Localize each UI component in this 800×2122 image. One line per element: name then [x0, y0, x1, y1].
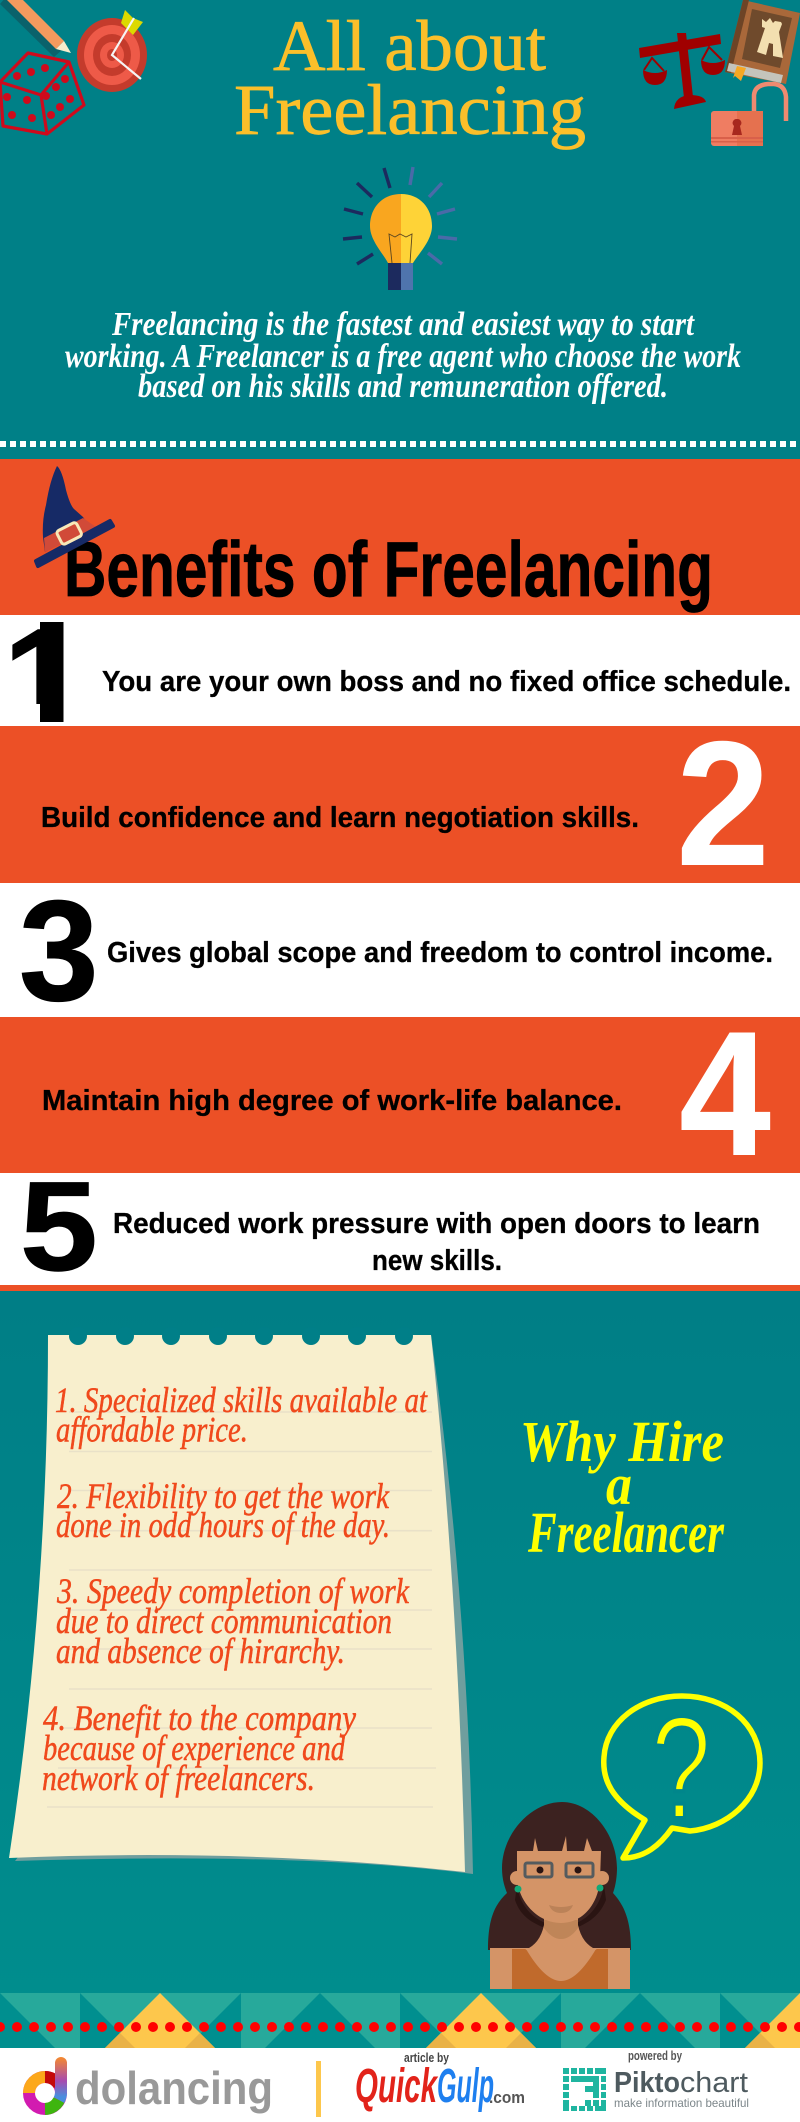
panel: benefit 4 [0, 994, 800, 1193]
panel: benefit 1 [12, 622, 790, 722]
reason 4: 4. Benefit to the company [43, 1698, 356, 1738]
logo: quickgulp: .com [489, 2088, 525, 2107]
number 2: 2 [676, 704, 770, 903]
title: All about [273, 6, 546, 86]
speech bubble with question mark [604, 1687, 760, 1858]
reason 2: 2. Flexibility to get the work [57, 1476, 390, 1516]
reason 3: and absence of hirarchy. [56, 1631, 345, 1671]
icon: dice [0, 53, 84, 134]
reason 4: because of experience and [43, 1728, 346, 1768]
benefit 5 text: new skills. [372, 1245, 502, 1277]
heading: why hire a freelancer [520, 1409, 724, 1565]
icon: witch hat [36, 466, 113, 566]
note paper [9, 1327, 473, 1874]
benefit 5 text [113, 1208, 760, 1277]
logo: dolancing: dolancing [75, 2062, 273, 2114]
icon: target with arrow [77, 10, 147, 92]
reason 2 [56, 1476, 390, 1545]
icon: book [725, 0, 800, 84]
logo: piktochart: Pikto [614, 2067, 680, 2099]
title [234, 6, 586, 150]
logo: quickgulp [355, 2051, 525, 2113]
benefit 2 text: Build confidence and learn negotiation skills. [41, 802, 639, 834]
number 5: 5 [20, 1156, 98, 1298]
benefit 3 text: Gives global scope and freedom to control income. [107, 937, 773, 969]
title: Freelancing [234, 70, 586, 150]
logo: quickgulp: Gulp [437, 2060, 494, 2113]
panel: benefits heading [0, 459, 800, 615]
speech bubble with question mark: ? [651, 1687, 711, 1850]
reason 1: 1. Specialized skills available at [55, 1380, 428, 1420]
intro paragraph: based on his skills and remuneration offered. [138, 368, 668, 405]
reason 4: network of freelancers. [42, 1758, 315, 1798]
heading: why hire a freelancer: a [606, 1452, 632, 1517]
panel: footer [0, 2048, 800, 2122]
reason 2: done in odd hours of the day. [56, 1505, 390, 1545]
logo: dolancing [29, 2057, 273, 2114]
reason 3: due to direct communication [56, 1601, 392, 1641]
logo: piktochart [563, 2049, 749, 2111]
intro paragraph: Freelancing is the fastest and easiest way to start [111, 306, 695, 343]
reason 1 [55, 1380, 428, 1450]
panel: why hire a freelancer [0, 1291, 800, 1993]
icon: padlock [711, 84, 786, 146]
logo: piktochart: chart [680, 2067, 748, 2099]
reason 3: 3. Speedy completion of work [56, 1571, 410, 1611]
panel: benefit 3 [0, 872, 800, 1031]
icon: pencil [0, 0, 71, 57]
logo: quickgulp: article by [404, 2051, 449, 2065]
number 3: 3 [19, 872, 99, 1031]
character: woman with glasses [488, 1802, 631, 1989]
intro paragraph [65, 306, 741, 405]
logo: piktochart: powered by [628, 2049, 682, 2063]
panel: intro header [0, 0, 800, 459]
number 1: 1 [3, 600, 84, 753]
heading: why hire a freelancer: Freelancer [527, 1500, 724, 1565]
benefit 5 text: Reduced work pressure with open doors to learn [113, 1208, 760, 1240]
panel: benefit 2 [0, 704, 800, 903]
number 1 [12, 622, 64, 722]
logo: piktochart: make information beautiful [614, 2096, 749, 2110]
benefit 4 text: Maintain high degree of work-life balance. [42, 1085, 622, 1117]
icon: light bulb [343, 167, 457, 290]
logo: quickgulp: Quick [355, 2060, 438, 2113]
number 4: 4 [679, 994, 771, 1193]
reason 3 [56, 1571, 410, 1671]
reason 4 [42, 1698, 356, 1798]
decorative band [0, 1993, 800, 2048]
reason 1: affordable price. [56, 1410, 248, 1450]
icon: balance scales [639, 33, 725, 109]
panel: benefit 5 [0, 1156, 800, 1298]
heading: why hire a freelancer: Why Hire [520, 1409, 724, 1474]
